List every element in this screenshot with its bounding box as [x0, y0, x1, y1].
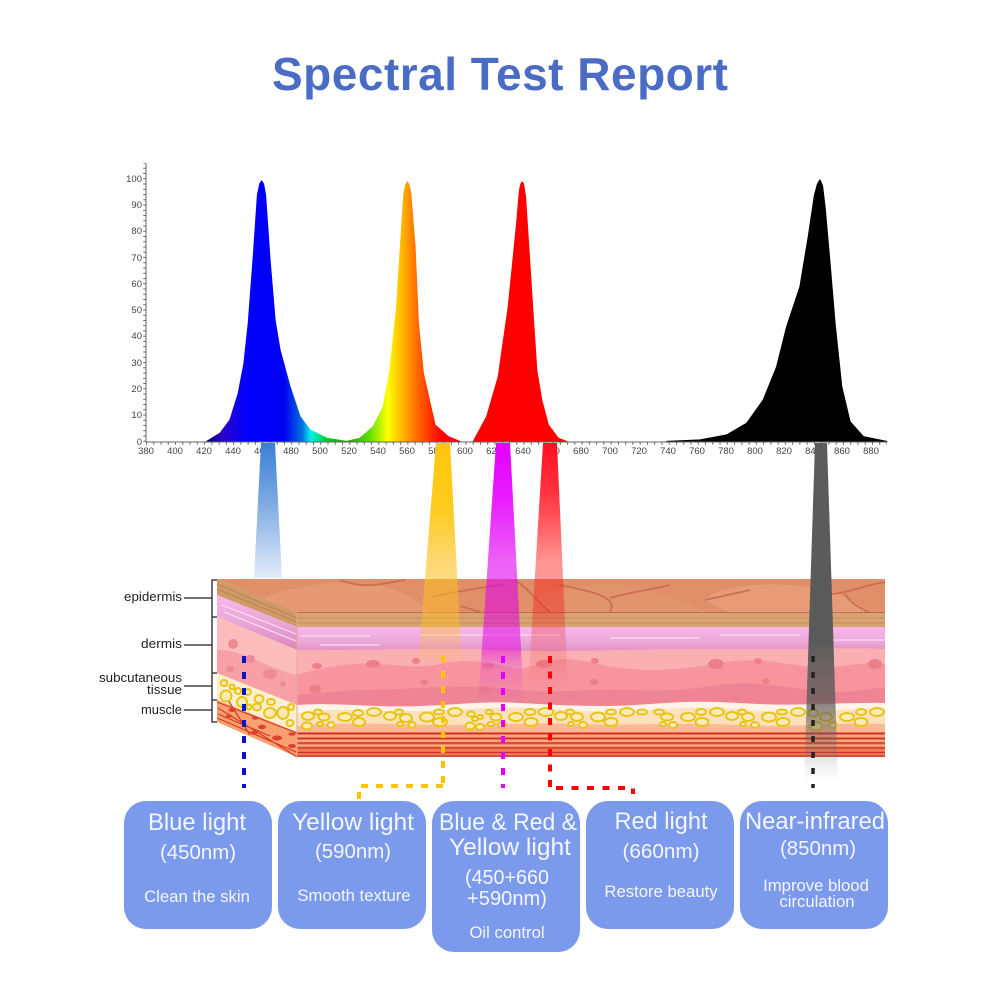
- y axis labels: [126, 174, 142, 448]
- x axis labels: 580: [428, 446, 444, 457]
- axes: [144, 163, 887, 444]
- x axis labels: 440: [225, 446, 241, 457]
- x axis labels: 780: [718, 446, 734, 457]
- card: blue light: (450nm): [160, 842, 236, 864]
- peak: blue 450nm: [207, 181, 347, 442]
- layer labels and bracket: [99, 580, 217, 722]
- x axis labels: 740: [660, 446, 676, 457]
- bracket: [184, 580, 217, 722]
- x axis labels: 500: [312, 446, 328, 457]
- x axis labels: 520: [341, 446, 357, 457]
- card: blue and red and yellow light: +590nm): [467, 888, 547, 910]
- card: near-infrared: (850nm): [780, 838, 856, 860]
- card: red light: [586, 801, 734, 929]
- x axis labels: 820: [776, 446, 792, 457]
- skin cross-section diagram: [217, 579, 885, 757]
- x axis labels: [138, 446, 879, 457]
- x axis labels: 380: [138, 446, 154, 457]
- label: dermis: dermis: [141, 637, 182, 651]
- x axis labels: 840: [805, 446, 821, 457]
- peak: yellow 590nm: [347, 182, 460, 442]
- spectrum chart: [126, 163, 887, 457]
- card: red light: Restore beauty: [604, 882, 718, 901]
- light beam: near-infrared: [804, 443, 838, 782]
- peak: near-infrared 850nm: [667, 180, 887, 442]
- card: yellow light: [278, 801, 426, 929]
- light beam: blue: [254, 443, 282, 578]
- dashed connector: magenta: [501, 656, 505, 788]
- card: near-infrared: [740, 801, 888, 929]
- y axis labels: 90: [131, 200, 142, 211]
- x axis labels: 660: [544, 446, 560, 457]
- light beam: blue red yellow combined: [478, 443, 524, 705]
- y axis labels: 50: [131, 305, 142, 316]
- x axis labels: 600: [457, 446, 473, 457]
- card: blue and red and yellow light: Oil control: [469, 923, 545, 942]
- card: yellow light: Smooth texture: [297, 886, 411, 905]
- label: subcutaneous tissue: [99, 671, 182, 697]
- y axis labels: 30: [131, 358, 142, 369]
- card: blue light: Blue light: [148, 809, 246, 836]
- light beam: yellow: [418, 443, 462, 665]
- x axis labels: 640: [515, 446, 531, 457]
- light beam: red: [528, 443, 568, 690]
- side face layers: [217, 579, 297, 757]
- dashed connector: near-infrared: [811, 656, 815, 788]
- card: blue and red and yellow light: [432, 801, 580, 952]
- top surface of skin: [217, 579, 885, 613]
- fat cells: [220, 680, 884, 730]
- y axis labels: 20: [131, 384, 142, 395]
- label: subcutaneous tissue: tissue: [147, 683, 182, 697]
- card: near-infrared: circulation: [779, 892, 855, 911]
- x axis labels: 760: [689, 446, 705, 457]
- card: blue and red and yellow light: (450+660: [465, 867, 549, 889]
- y axis labels: 40: [131, 331, 142, 342]
- card: blue light: [124, 801, 272, 929]
- label: subcutaneous tissue: subcutaneous: [99, 671, 182, 685]
- card: yellow light: (590nm): [315, 841, 391, 863]
- card: blue light: Clean the skin: [144, 887, 250, 906]
- label: muscle: muscle: [141, 703, 182, 717]
- peak: red 660nm: [473, 182, 567, 442]
- y axis labels: 10: [131, 410, 142, 421]
- x axis labels: 460: [254, 446, 270, 457]
- x axis labels: 880: [863, 446, 879, 457]
- x axis labels: 400: [167, 446, 183, 457]
- x axis labels: 480: [283, 446, 299, 457]
- front face layers: [297, 613, 885, 757]
- card: near-infrared: Improve blood: [763, 876, 869, 895]
- card: near-infrared: Near-infrared: [745, 808, 885, 835]
- x axis labels: 700: [602, 446, 618, 457]
- x axis labels: 680: [573, 446, 589, 457]
- y axis labels: 70: [131, 253, 142, 264]
- card: red light: Red light: [614, 808, 708, 835]
- card: yellow light: Yellow light: [292, 809, 414, 836]
- x axis labels: 800: [747, 446, 763, 457]
- y axis labels: 80: [131, 226, 142, 237]
- x axis labels: 620: [486, 446, 502, 457]
- label: epidermis: epidermis: [124, 590, 182, 604]
- x axis labels: 540: [370, 446, 386, 457]
- y axis labels: 100: [126, 174, 142, 185]
- y axis labels: 60: [131, 279, 142, 290]
- x axis labels: 560: [399, 446, 415, 457]
- x axis labels: 720: [631, 446, 647, 457]
- x axis labels: 860: [834, 446, 850, 457]
- card: red light: (660nm): [622, 841, 700, 863]
- dashed connector: red: [550, 656, 633, 794]
- x axis labels: 420: [196, 446, 212, 457]
- title: Spectral Test Report: [272, 48, 728, 100]
- y axis labels: 0: [137, 437, 142, 448]
- card: blue and red and yellow light: Blue & Red &: [439, 809, 577, 836]
- dashed connector: blue: [242, 656, 246, 788]
- dashed connector: yellow: [359, 656, 443, 800]
- card: blue and red and yellow light: Yellow light: [449, 834, 571, 861]
